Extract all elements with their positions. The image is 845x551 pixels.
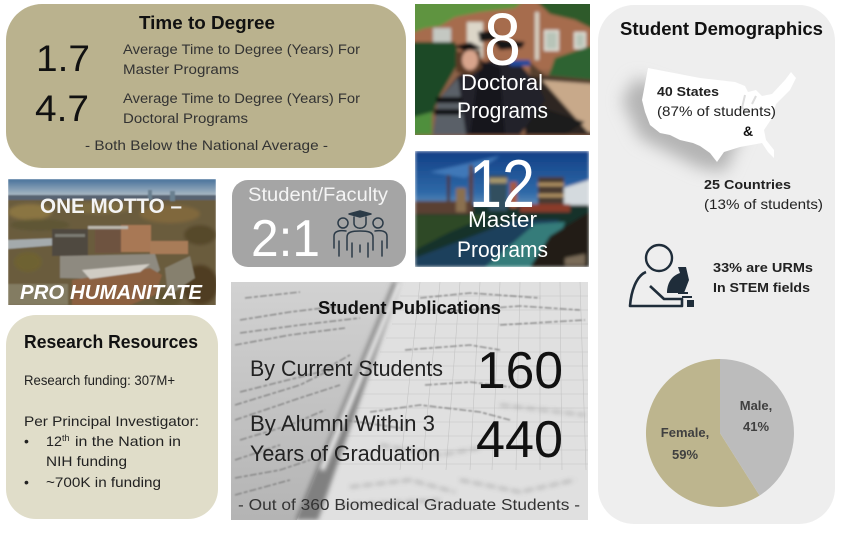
label: master programs: Programs [457, 237, 548, 262]
text: pro humanitate: PRO HUMANITATE [20, 282, 203, 304]
heading: student publications: Student Publications [318, 298, 501, 318]
text: per principal investigator: Per Principal Investigator: [24, 413, 199, 429]
label: doctoral programs: Doctoral [461, 70, 543, 95]
text: ampersand: & [743, 123, 753, 139]
panel: time to degree [6, 4, 406, 168]
text: 40 states: (87% of students) [657, 103, 776, 119]
text: by alumni: By Alumni Within 3 [250, 411, 435, 436]
text: by alumni: Years of Graduation [250, 441, 440, 466]
number: 12: 12 [469, 146, 535, 222]
panel: research resources [6, 315, 218, 519]
number: 440: 440 [476, 411, 563, 469]
stat: doctoral years: 4.7 [35, 88, 89, 129]
text: 40 states: 40 States [657, 84, 719, 99]
map: united states [622, 68, 796, 172]
note: below national average: - Both Below the National Average - [85, 137, 328, 153]
text: one motto: ONE MOTTO – [40, 195, 182, 218]
list: funding bullets: th [62, 433, 70, 443]
label: student/faculty: Student/Faculty [248, 185, 389, 206]
number: 160: 160 [477, 342, 563, 400]
heading: student demographics: Student Demographics [620, 19, 823, 39]
note: out of 360 students: - Out of 360 Biomedical Graduate Students - [238, 497, 580, 514]
list: funding bullets: in the Nation in [75, 433, 181, 449]
text: URMs in STEM: 33% are URMs [713, 260, 813, 275]
number: 8: 8 [484, 0, 521, 81]
text: doctoral description: Average Time to Degree (Years) For [123, 91, 361, 106]
text: 25 countries: (13% of students) [704, 196, 823, 212]
stat: master years: 1.7 [36, 38, 90, 79]
slice: male 41% [720, 359, 794, 496]
panel: student demographics [598, 5, 835, 524]
pie chart: gender [646, 359, 794, 507]
heading: time to degree: Time to Degree [139, 12, 275, 33]
label: female: 59% [672, 447, 698, 462]
label: female: Female, [661, 425, 709, 440]
list: funding bullets: • [24, 474, 29, 490]
icon: graduate with two people [334, 211, 387, 257]
text: master description: Average Time to Degree (Years) For [123, 42, 361, 57]
text: by current students: By Current Students [250, 356, 443, 381]
label: male: Male, [740, 398, 772, 413]
icon: scientist at microscope [630, 245, 694, 307]
label: doctoral programs: Programs [457, 98, 548, 123]
panel: student faculty ratio [232, 180, 406, 268]
panel: doctoral programs photo [415, 4, 590, 135]
panel: motto photo [8, 179, 218, 306]
list: funding bullets: • [24, 433, 29, 449]
list: funding bullets: NIH funding [46, 453, 127, 469]
text: doctoral description: Doctoral Programs [123, 111, 248, 126]
number: ratio: 2:1 [251, 210, 320, 268]
label: master programs: Master [468, 207, 537, 232]
list: funding bullets: 12 [46, 433, 62, 449]
heading: research resources: Research Resources [24, 332, 198, 352]
text: master description: Master Programs [123, 62, 239, 77]
text: 25 countries: 25 Countries [704, 177, 791, 192]
text: URMs in STEM: In STEM fields [713, 280, 810, 295]
slice: female 59% [646, 359, 760, 507]
list: funding bullets: ~700K in funding [46, 474, 161, 490]
label: male: 41% [743, 419, 769, 434]
panel: student publications [231, 282, 588, 520]
text: research funding: Research funding: 307M+ [24, 372, 175, 388]
panel: master programs photo [415, 146, 589, 267]
